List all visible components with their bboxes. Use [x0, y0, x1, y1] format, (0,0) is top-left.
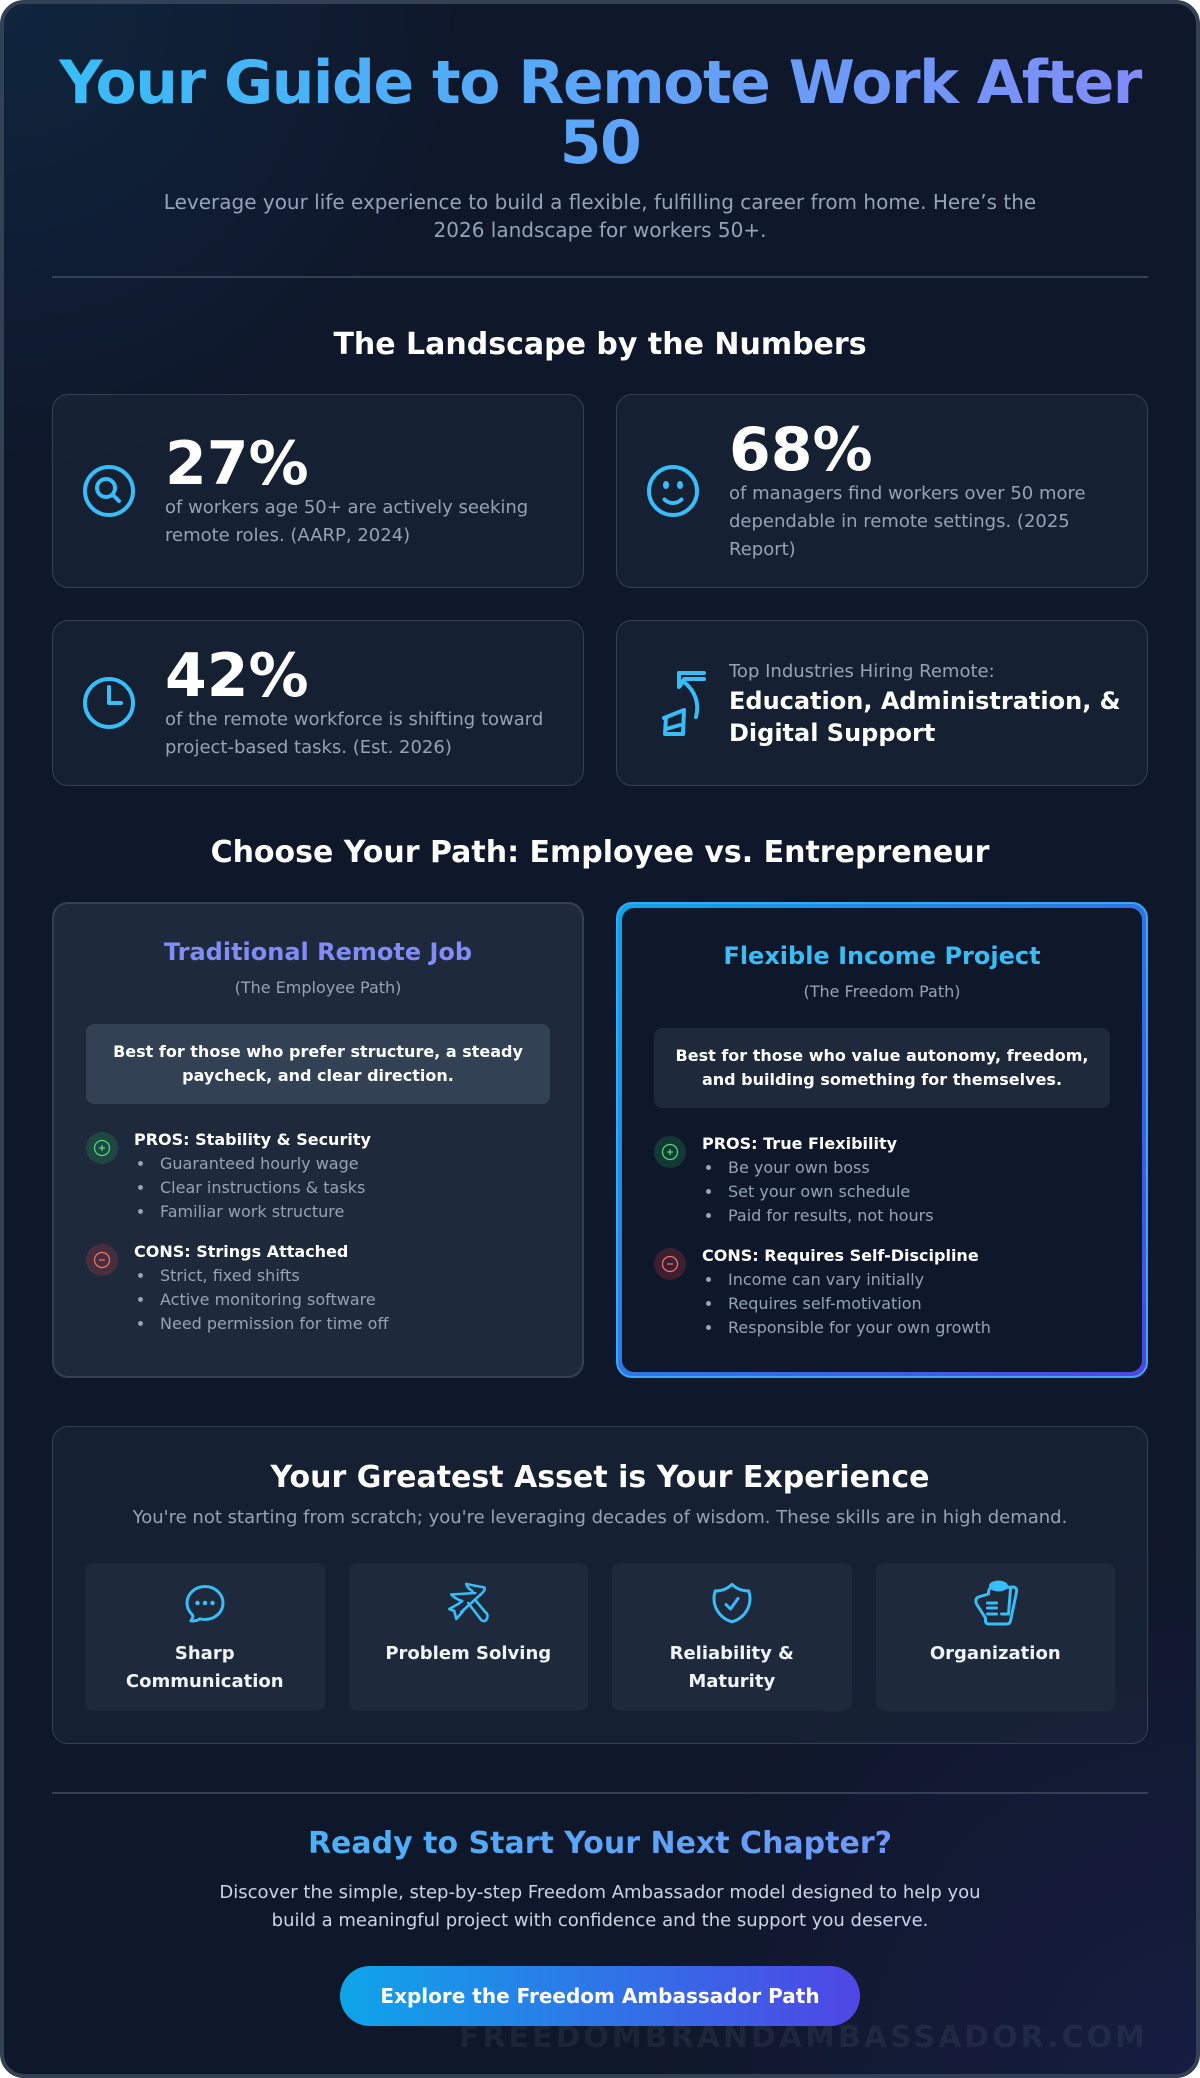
card title: Flexible Income Project — [723, 942, 1041, 970]
tile: reliability and maturity: Reliability & Maturity — [670, 1643, 794, 1692]
cons text: Requires self-motivation — [728, 1294, 922, 1313]
icon: tools — [448, 1582, 489, 1622]
card subtitle: (The Freedom Path) — [803, 982, 961, 1001]
cons text — [702, 1246, 991, 1337]
icon: plus circle — [86, 1132, 118, 1164]
stat text: 42%: 42% — [165, 641, 309, 711]
callout: best for: Best for those who value autonomy, freedom, and building something for themselves. — [676, 1046, 1088, 1089]
text: cta description — [219, 1882, 981, 1931]
panel: greatest asset — [52, 1426, 1148, 1744]
skill tiles — [85, 1563, 1115, 1711]
cons text — [134, 1242, 389, 1333]
subtitle: Leverage your life experience to build a flexible, fulfilling career from home. Here’s the — [164, 190, 1036, 214]
button — [340, 1966, 860, 2026]
icon: clipboard — [974, 1580, 1018, 1626]
card subtitle: (The Employee Path) — [235, 978, 401, 997]
icon: clock — [83, 677, 135, 729]
stat text: 68% — [729, 415, 1086, 560]
pros text: Guaranteed hourly wage — [160, 1154, 359, 1173]
cons text: Income can vary initially — [728, 1270, 924, 1289]
stat text: top industries — [728, 661, 1121, 747]
text: experience intro: You're not starting from scratch; you're leveraging decades of wisdom. These skills are in high demand. — [133, 1507, 1067, 1528]
cons text: CONS: Strings Attached — [134, 1242, 348, 1261]
pros text: Set your own schedule — [728, 1182, 910, 1201]
stat text: top industries: Education, Administration, & Digital Support — [729, 687, 1121, 747]
pros text: Be your own boss — [728, 1158, 870, 1177]
cons text: Need permission for time off — [160, 1314, 388, 1333]
callout: best for — [86, 1024, 550, 1104]
icon: arrow and tag glyph — [662, 671, 706, 736]
card title: Traditional Remote Job — [164, 938, 472, 966]
panel: flexible income project — [616, 902, 1148, 1378]
heading: ready: Ready to Start Your Next Chapter? — [308, 1826, 892, 1861]
heading: experience: Your Greatest Asset is Your Experience — [271, 1460, 929, 1495]
panel: statistics grid — [52, 394, 1148, 786]
subtitle — [164, 190, 1036, 242]
stat text: top industries: Top Industries Hiring Remote: — [729, 661, 995, 682]
title: Your Guide to Remote Work After 50 — [59, 48, 1141, 178]
tile: reliability and maturity — [612, 1563, 852, 1711]
stat text: 68%: of managers find workers over 50 more dependable in remote settings. (2025 Report) — [729, 483, 1086, 560]
stat text: 27%: of workers age 50+ are actively seeking remote roles. (AARP, 2024) — [165, 497, 528, 546]
callout: best for: Best for those who prefer structure, a steady paycheck, and clear direction. — [113, 1042, 523, 1085]
cons list — [654, 1246, 991, 1337]
pros text: PROS: True Flexibility — [702, 1134, 897, 1153]
subtitle: 2026 landscape for workers 50+. — [434, 218, 766, 242]
pros text: Clear instructions & tasks — [160, 1178, 365, 1197]
stat card: 68% — [616, 394, 1148, 588]
card inner — [622, 908, 1142, 1372]
cons list — [86, 1242, 389, 1333]
stat text: 27% — [165, 429, 528, 546]
pros text — [702, 1134, 934, 1225]
cons text: Responsible for your own growth — [728, 1318, 991, 1337]
icon: plus circle — [654, 1136, 686, 1168]
pros text — [134, 1130, 371, 1221]
icon: chat bubble — [186, 1585, 224, 1622]
pros text: PROS: Stability & Security — [134, 1130, 371, 1149]
callout: best for — [654, 1028, 1110, 1108]
stat text: 68%: 68% — [729, 415, 873, 485]
heading: choose your path: Choose Your Path: Employee vs. Entrepreneur — [211, 835, 989, 870]
button: Explore the Freedom Ambassador Path — [380, 1984, 820, 2008]
panel: traditional remote job — [52, 902, 584, 1378]
text: cta description: build a meaningful project with confidence and the support you deserve. — [272, 1910, 928, 1931]
tile: problem solving: Problem Solving — [385, 1643, 551, 1664]
pros list — [654, 1134, 934, 1225]
cons text: CONS: Requires Self-Discipline — [702, 1246, 979, 1265]
tile: problem solving — [348, 1563, 588, 1711]
call to action — [52, 1792, 1148, 2026]
stat text: 27%: 27% — [165, 429, 309, 499]
heading: landscape: The Landscape by the Numbers — [333, 327, 867, 362]
pros list — [86, 1130, 371, 1221]
tile: sharp communication — [85, 1563, 324, 1711]
pros text: Familiar work structure — [160, 1202, 344, 1221]
panel: path comparison — [52, 902, 1148, 1378]
cons text: Active monitoring software — [160, 1290, 376, 1309]
stat card: top industries — [616, 620, 1148, 786]
tile: organization: Organization — [930, 1643, 1061, 1664]
icon: minus circle — [86, 1244, 118, 1276]
icon: shield check — [712, 1582, 752, 1624]
header — [52, 52, 1148, 278]
stat card: 42% — [52, 620, 584, 786]
stat card: 27% — [52, 394, 584, 588]
icon: magnifying glass in circle — [83, 465, 135, 517]
tile: organization — [876, 1563, 1115, 1711]
stat text: 42%: of the remote workforce is shifting toward project-based tasks. (Est. 2026) — [165, 709, 543, 758]
watermark: FREEDOMBRANDAMBASSADOR.COM — [459, 2020, 1148, 2055]
stat text: 42% — [165, 641, 543, 758]
text: cta description: Discover the simple, step-by-step Freedom Ambassador model designed to help you — [219, 1882, 981, 1903]
icon: smiling face — [647, 465, 699, 517]
heading: ready — [52, 1826, 1148, 1862]
pros text: Paid for results, not hours — [728, 1206, 934, 1225]
icon: minus circle — [654, 1248, 686, 1280]
cons text: Strict, fixed shifts — [160, 1266, 300, 1285]
tile: sharp communication: Sharp Communication — [126, 1643, 284, 1692]
